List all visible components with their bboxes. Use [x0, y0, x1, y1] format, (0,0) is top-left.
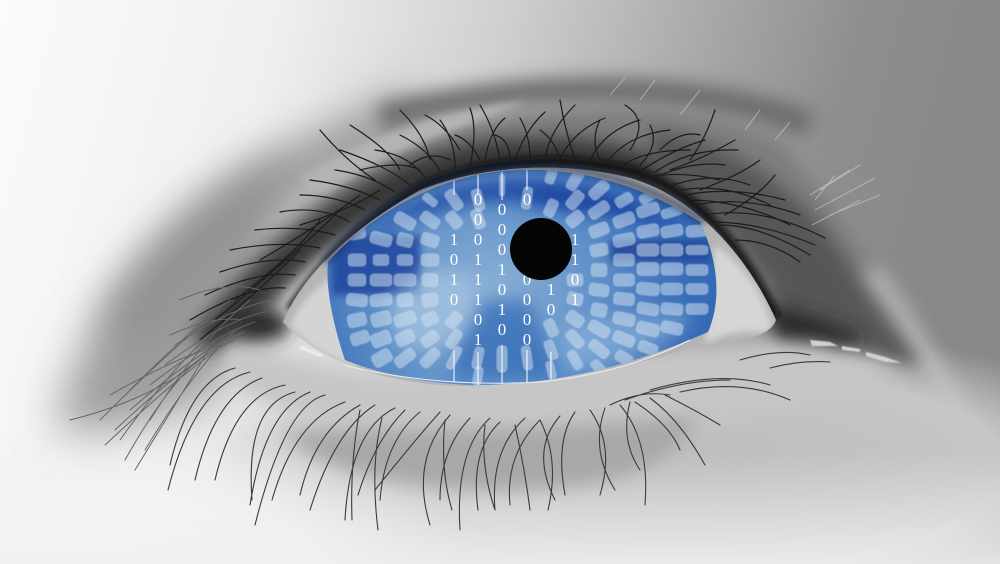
left corner shadow: [234, 309, 290, 341]
binary digit columns: 0: [450, 250, 458, 269]
binary digit columns: 1: [498, 300, 506, 319]
binary digit columns: 0: [498, 320, 506, 339]
deep blue right band: [610, 240, 710, 262]
lower face shading: [0, 300, 1000, 564]
pale iris patches: [390, 270, 480, 350]
ridge highlight right: [870, 270, 985, 470]
binary digit columns: 1: [571, 230, 579, 249]
dark upper lid rim: [290, 161, 776, 318]
eye opening: [282, 154, 782, 386]
deep blue upper iris: [360, 181, 690, 240]
vertical light streaks: [454, 170, 551, 385]
binary capsules: [346, 167, 708, 386]
lower lid: [224, 342, 900, 429]
pupil: [510, 218, 572, 280]
fine pale hairs on outer lid: [610, 78, 880, 225]
binary digit columns: 0: [571, 270, 579, 289]
outer corner shadow: [765, 300, 860, 360]
lower eyelashes: [168, 352, 830, 530]
deep blue left band: [332, 235, 420, 295]
binary digit columns: 1: [474, 250, 482, 269]
left fading eyelashes: [70, 287, 275, 470]
binary digit columns: 1: [547, 280, 555, 299]
tear highlights at outer corner: [810, 340, 902, 363]
binary digit columns: 1: [474, 330, 482, 349]
binary digit columns: 0: [547, 300, 555, 319]
upper lid shadow on iris: [325, 166, 705, 262]
binary digit columns: 1: [474, 270, 482, 289]
iris with binary code: [327, 170, 716, 385]
binary digit columns: 1: [498, 260, 506, 279]
upper lid: [190, 105, 925, 360]
deep blue lower iris: [450, 300, 560, 380]
binary digit columns: 0: [450, 290, 458, 309]
binary digit columns: 0: [498, 280, 506, 299]
brow crease band left: [120, 115, 420, 340]
binary digit columns: 0: [474, 190, 482, 209]
binary digit columns: 0: [523, 330, 531, 349]
binary digit columns: 0: [523, 190, 531, 209]
binary digit columns: 0: [523, 310, 531, 329]
binary digit columns: 1: [571, 290, 579, 309]
binary digit columns: 0: [498, 200, 506, 219]
iris lower rim highlight: [345, 340, 690, 383]
binary digit columns: 1: [474, 290, 482, 309]
binary digit columns: 0: [474, 210, 482, 229]
sclera: [283, 168, 776, 386]
left soft brow shadow: [55, 150, 290, 431]
binary digit columns: 0: [474, 310, 482, 329]
binary digit columns: 0: [498, 240, 506, 259]
binary digit columns: 0: [498, 220, 506, 239]
binary digit columns: [450, 190, 579, 349]
binary digit columns: 0: [474, 230, 482, 249]
binary digit columns: 0: [523, 270, 531, 289]
lower lid waterline highlight: [300, 347, 322, 356]
brow crease band top: [380, 90, 810, 125]
binary digit columns: 1: [450, 270, 458, 289]
binary digit columns: 1: [571, 250, 579, 269]
under-eye shadow: [280, 415, 700, 490]
upper eyelashes: [190, 100, 825, 340]
binary digit columns: 1: [547, 220, 555, 239]
lash mass dark: [205, 154, 720, 345]
binary digit columns: 1: [450, 230, 458, 249]
lid fold highlight: [300, 100, 530, 195]
binary digit columns: 0: [523, 290, 531, 309]
outer lid dark: [650, 130, 925, 362]
